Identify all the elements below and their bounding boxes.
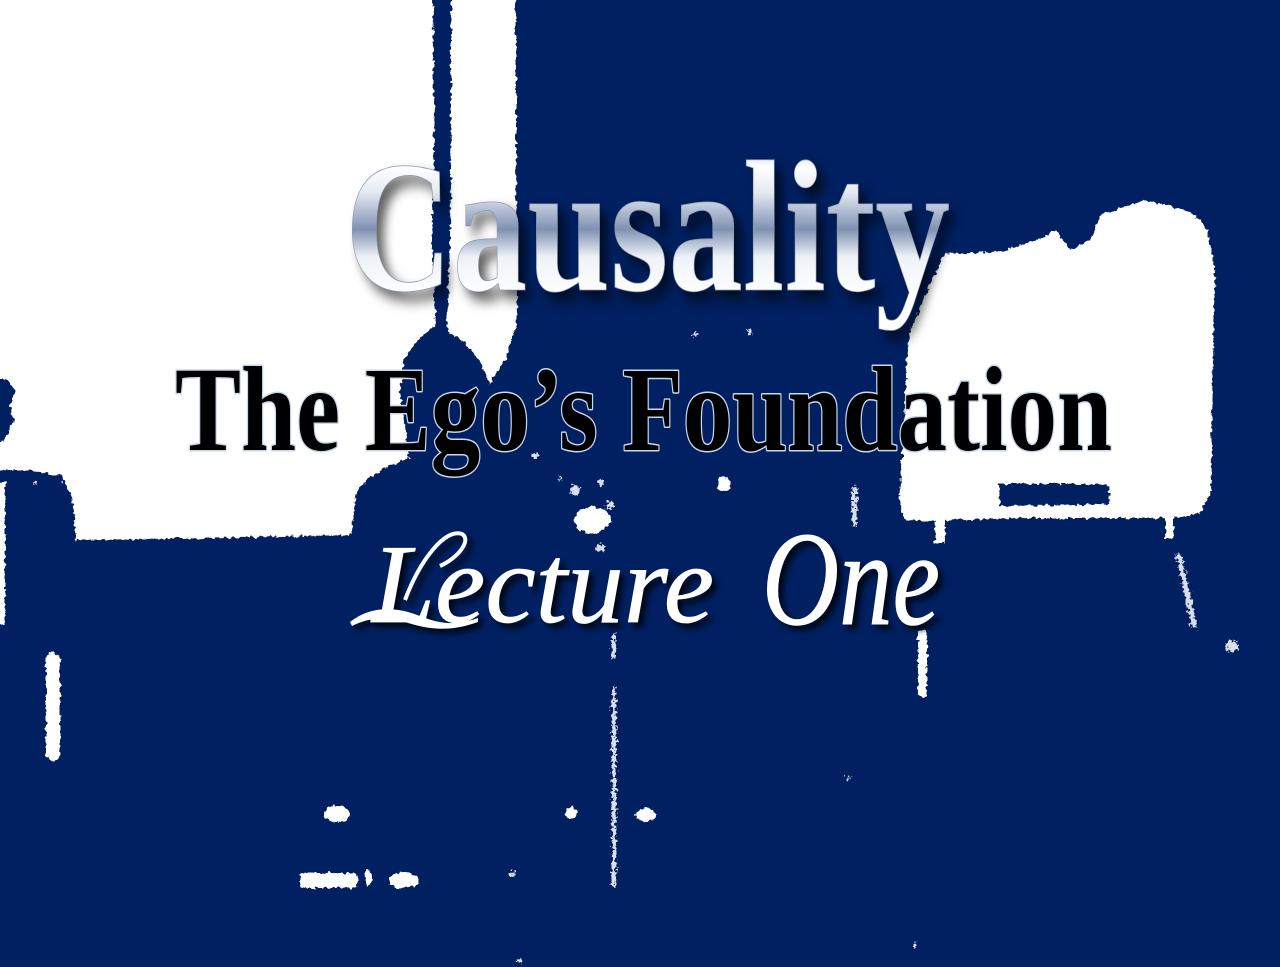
heading: Causality: Causality [345,123,950,331]
left white silhouette [0,0,517,625]
lecture label: Lecture One: One [762,504,940,653]
subheading: The Ego's Foundation: The Ego’s Foundation [175,343,1112,476]
lecture label: Lecture One: Lecture [370,523,714,647]
lecture label: Lecture One [350,504,940,653]
right white silhouette: easel board [899,200,1215,543]
scattered white specks [33,330,1238,963]
